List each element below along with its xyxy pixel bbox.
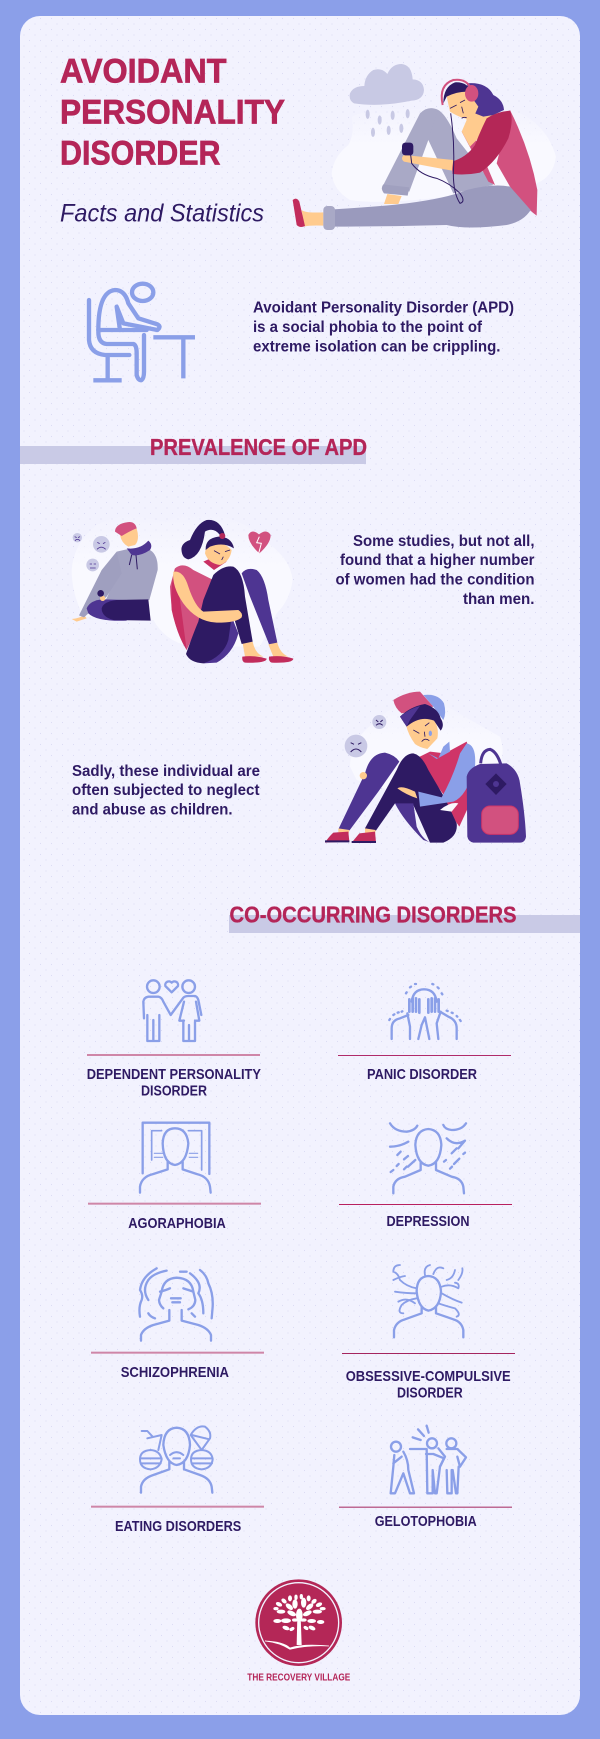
line [91, 1352, 264, 1354]
title [60, 52, 285, 172]
line [91, 1506, 264, 1508]
logo: the recovery village tree [255, 1579, 342, 1666]
line [339, 1507, 512, 1508]
text: prevalence in women: than men. [463, 591, 534, 608]
label: dependent personality disorder: DEPENDENT PERSONALITY [87, 1066, 261, 1083]
title: DISORDER [60, 134, 220, 172]
line [342, 1352, 515, 1355]
label: schizophrenia: SCHIZOPHRENIA [121, 1364, 229, 1381]
icon: person slumped at desk [89, 284, 195, 380]
icon: depression, head in storm [390, 1123, 466, 1193]
logo caption: THE RECOVERY VILLAGE [247, 1671, 350, 1683]
title: AVOIDANT [60, 52, 227, 90]
text: prevalence in women: found that a higher number [340, 552, 534, 569]
illustration: sad woman with headphones under rain cloud [293, 64, 556, 230]
text: neglect and abuse: often subjected to neglect [72, 782, 260, 799]
icon: panic, hands over face [389, 984, 461, 1039]
label: eating disorders: EATING DISORDERS [115, 1518, 241, 1535]
illustration: sad man and woman sitting [72, 513, 293, 663]
label: agoraphobia: AGORAPHOBIA [128, 1215, 226, 1232]
grid: top four disorders [87, 980, 512, 1232]
heading: prevalence of APD [20, 434, 367, 464]
icon: agoraphobia, head in window [140, 1123, 211, 1193]
label: dependent personality disorder [87, 1066, 261, 1100]
label: gelotophobia: GELOTOPHOBIA [375, 1513, 477, 1530]
intro text [253, 300, 514, 356]
intro text: is a social phobia to the point of [253, 319, 483, 336]
label: dependent personality disorder: DISORDER [141, 1083, 207, 1100]
label: obsessive-compulsive disorder: OBSESSIVE-COMPULSIVE [346, 1368, 511, 1385]
intro text: Avoidant Personality Disorder (APD) [253, 300, 514, 316]
illustration: sad boy with backpack [325, 692, 526, 843]
icon: dependent personality couple [143, 980, 201, 1041]
intro text: extreme isolation can be crippling. [253, 338, 500, 356]
subtitle: Facts and Statistics [60, 200, 264, 228]
text: neglect and abuse: Sadly, these individual are [72, 763, 260, 780]
heading: co-occurring disorders: CO-OCCURRING DISORDERS [230, 902, 516, 928]
title: PERSONALITY [60, 94, 285, 132]
text: neglect and abuse [72, 763, 260, 818]
icon: obsessive-compulsive, tangled thoughts [393, 1265, 463, 1337]
icon: eating disorders, head with food [140, 1426, 213, 1493]
text: prevalence in women: of women had the condition [336, 572, 534, 588]
label: obsessive-compulsive disorder [346, 1368, 511, 1402]
text: neglect and abuse: and abuse as children. [72, 802, 232, 818]
icon: schizophrenia [139, 1268, 213, 1341]
line [339, 1204, 512, 1205]
line [338, 1055, 511, 1056]
text: prevalence in women [336, 533, 534, 608]
text: prevalence in women: Some studies, but not all, [353, 533, 534, 550]
grid: bottom four disorders [91, 1265, 515, 1535]
heading: prevalence of APD: PREVALENCE OF APD [150, 434, 367, 460]
label: panic disorder: PANIC DISORDER [367, 1066, 477, 1083]
label: obsessive-compulsive disorder: DISORDER [397, 1385, 463, 1402]
label: depression: DEPRESSION [386, 1213, 469, 1230]
line [87, 1054, 260, 1056]
icon: gelotophobia, people pointing and laughing [391, 1426, 466, 1493]
line [88, 1203, 261, 1205]
